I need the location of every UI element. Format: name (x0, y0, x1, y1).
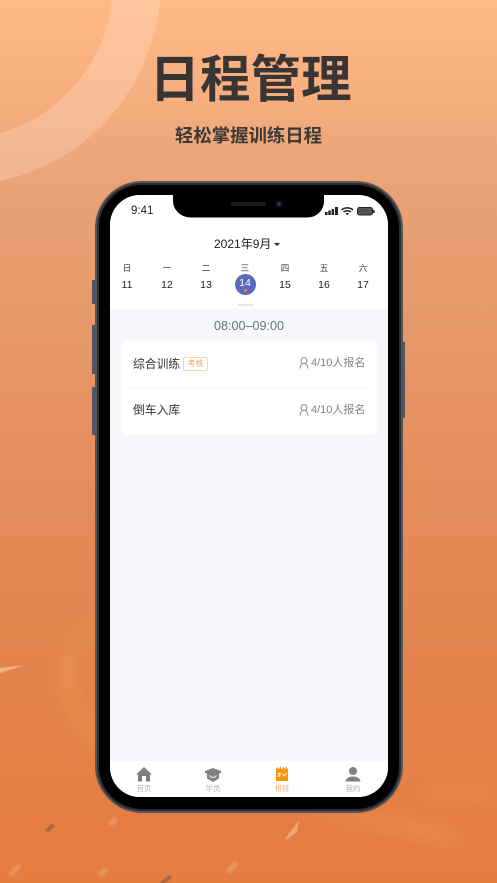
exam tag (183, 357, 208, 371)
dates: 14 (239, 277, 251, 289)
month selector: 2021年9月 (214, 237, 271, 251)
dates: 16 (318, 279, 330, 291)
class name 2: 倒车入库 (133, 403, 180, 417)
title: 日程管理 (150, 51, 352, 108)
time slot: 08:00–09:00 (214, 319, 284, 333)
dates: 12 (161, 279, 173, 291)
dates: 15 (279, 279, 291, 291)
row divider (129, 387, 369, 388)
icon: graduation cap (205, 768, 221, 782)
weekdays: 日 (123, 263, 131, 273)
dates: 11 (122, 279, 132, 291)
weekdays: 三 (241, 263, 249, 273)
weekdays: 五 (320, 263, 328, 273)
signup 2: 4/10人报名 (311, 404, 365, 416)
tab: schedule active: 排班 (275, 784, 289, 793)
speaker (231, 202, 266, 206)
icon: person (300, 357, 308, 368)
tab: mine (346, 767, 360, 793)
tab: schedule active (275, 767, 289, 793)
notch (173, 195, 324, 218)
calendar header panel (110, 195, 388, 309)
icon: user (346, 767, 360, 782)
icon: person (300, 404, 308, 416)
icon: home (136, 767, 152, 782)
order dot (244, 289, 247, 292)
exam tag: 考核 (188, 359, 204, 368)
screen (110, 195, 388, 797)
signup 1: 4/10人报名 (311, 357, 365, 369)
tab: home: 首页 (137, 784, 151, 793)
weekdays (123, 263, 367, 273)
tab: mine: 我的 (346, 784, 360, 793)
camera (276, 200, 282, 208)
selected date circle (235, 274, 256, 295)
dates (122, 277, 369, 291)
drag handle (238, 304, 253, 306)
phone frame (95, 181, 403, 813)
dates: 13 (200, 279, 212, 291)
weekdays: 六 (359, 263, 367, 273)
tab: home (136, 767, 152, 793)
tab bar (110, 761, 388, 797)
icon: calendar (276, 767, 288, 781)
status time: 9:41 (131, 205, 153, 217)
weekdays: 一 (163, 263, 171, 273)
subtitle: 轻松掌握训练日程 (175, 125, 322, 146)
tab: students (205, 768, 221, 793)
weekdays: 二 (202, 263, 210, 273)
class card (121, 340, 377, 435)
dropdown arrow (274, 243, 280, 246)
class name 1: 综合训练 (133, 357, 180, 371)
tab: students: 学员 (206, 784, 220, 793)
phone (92, 181, 405, 813)
status icons (325, 207, 374, 216)
side buttons (92, 280, 96, 304)
weekdays: 四 (281, 263, 289, 273)
dates: 17 (357, 279, 369, 291)
